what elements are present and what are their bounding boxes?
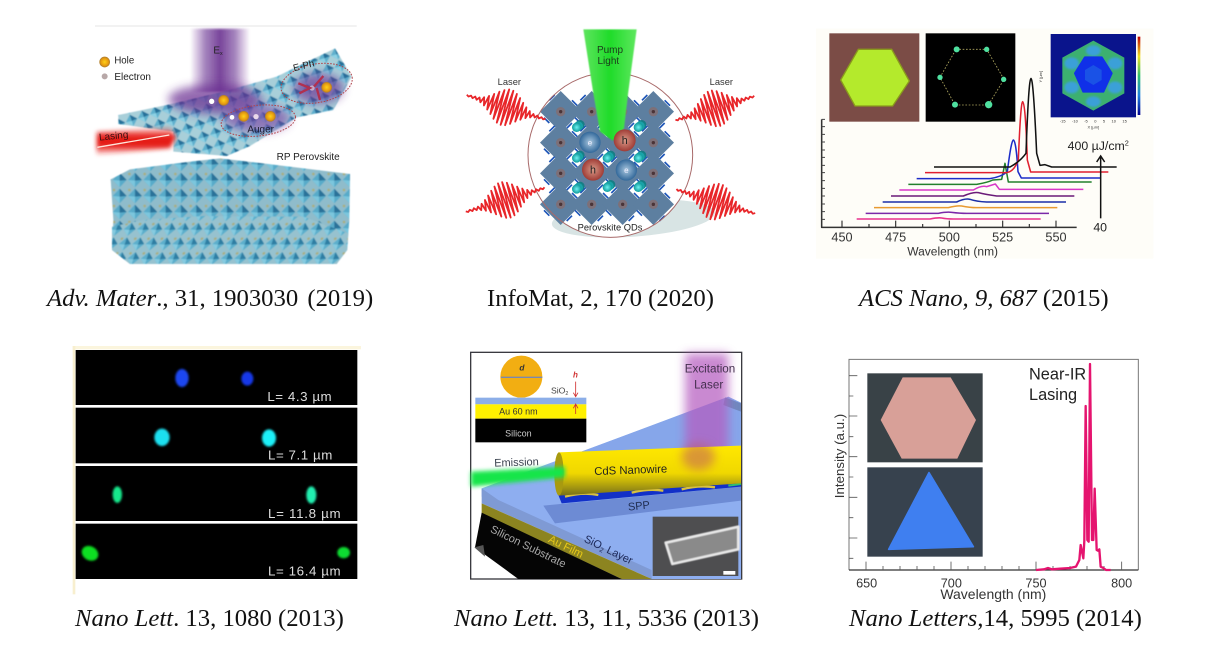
row: L = 11.8 um: L= 11.8 µm [268, 506, 341, 521]
x axis title: Wavelength (nm) [907, 244, 998, 258]
SPP field [558, 482, 741, 503]
photo: emission at hexagon corners [926, 33, 1015, 122]
panel: near-IR lasing spectrum [832, 359, 1138, 602]
x axis tick labels: 700 [941, 576, 962, 590]
laser labels: Laser [710, 77, 733, 87]
cross-section inset: 2 [565, 391, 568, 397]
excitation beam Ex: E [213, 45, 220, 56]
shadow ellipse [551, 194, 716, 242]
excitation beam Ex [168, 29, 343, 132]
x axis tick labels [856, 576, 1132, 590]
x axis tick labels: 450 [831, 230, 853, 244]
legend: hole and electron: Hole [114, 56, 134, 67]
caption: Nano Letters: Nano Letters,14, 5995 (2014) [848, 605, 1142, 632]
electrons and holes: h [590, 164, 596, 176]
CdS nanowire: CdS Nanowire [594, 463, 667, 478]
excitation laser: Laser [694, 378, 723, 391]
x axis tick labels: 650 [856, 576, 877, 590]
layer labels [488, 499, 651, 570]
legend: hole and electron [99, 56, 151, 83]
pump light beam [583, 29, 637, 141]
upper bent perovskite film [118, 48, 352, 156]
panel: nanowire emission length series [73, 346, 361, 594]
waterfall spectra chart [822, 78, 1117, 227]
electrons and holes [579, 129, 637, 181]
chart frame [849, 359, 1138, 570]
cross-section inset: d [519, 363, 525, 373]
label: Near-IR Lasing: Lasing [1029, 386, 1077, 404]
E-Ph region: E-Ph [292, 58, 316, 74]
laser labels [498, 77, 733, 87]
lasing beam [97, 127, 176, 155]
layer labels: Layer [602, 543, 635, 567]
row: L = 4.3 um: L= 4.3 µm [267, 389, 332, 404]
emission beam: Emission [494, 456, 539, 470]
cross-section inset: SiO [551, 385, 565, 395]
panel: perovskite QD pump light illustration [461, 29, 760, 242]
label: Perovskite QDs: Perovskite QDs [578, 222, 643, 232]
layer labels: SPP [627, 499, 651, 514]
x axis tick labels: 550 [1045, 230, 1067, 244]
excitation laser: Excitation [685, 363, 735, 376]
layer labels: SiO [582, 533, 604, 552]
Auger region [220, 102, 297, 140]
panel: CdS nanowire plasmon laser schematic [471, 352, 742, 579]
row: L = 16.4 um [76, 524, 357, 579]
photo: pink hexagon [867, 373, 983, 462]
photo: green hexagon [829, 33, 919, 122]
label: RP Perovskite: RP Perovskite [277, 152, 340, 163]
crystal lattice in circle [528, 73, 693, 237]
CdS nanowire [554, 443, 741, 496]
legend: hole and electron: Electron [114, 72, 151, 83]
layer labels: 2 [598, 547, 605, 555]
laser labels: Laser [498, 77, 521, 87]
fluence arrow: 40 [1093, 220, 1107, 234]
label: Near-IR Lasing [1029, 365, 1086, 404]
caption: ACS Nano: ACS Nano, 9, 687 (2015) [857, 285, 1109, 312]
cross-section inset: Silicon [505, 428, 532, 438]
electrons and holes: e [624, 166, 629, 175]
E-Ph region [278, 58, 355, 109]
pump light beam: Light [598, 56, 619, 67]
x axis tick labels: 525 [992, 230, 1013, 244]
layer labels: Au Film [546, 534, 585, 561]
x axis title: Wavelength (nm) [940, 586, 1046, 602]
electrons and holes: h [622, 135, 628, 147]
caption: Adv. Mater.: Adv. Mater., 31, 1903030 (2019) [45, 285, 373, 312]
caption: InfoMat: InfoMat, 2, 170 (2020) [487, 285, 714, 312]
layered substrate [474, 397, 741, 579]
row: L = 4.3 um [76, 350, 357, 405]
row: L = 7.1 um: L= 7.1 µm [268, 447, 332, 462]
layer labels: Silicon Substrate [488, 524, 568, 570]
caption: Nano Lett. 13, 1080: Nano Lett. 13, 1080 (2013) [74, 605, 344, 632]
caption: Nano Lett. 13, 11, 5336: Nano Lett. 13, 11, 5336 (2013) [453, 605, 759, 632]
excitation laser [685, 353, 735, 460]
cross-section inset: Au 60 nm [499, 406, 538, 416]
x axis tick labels: 750 [1025, 576, 1047, 590]
y axis title: Intensity (a.u.) [832, 414, 847, 498]
carriers [209, 82, 332, 122]
lasing beam: Lasing [98, 130, 129, 144]
pump light beam: Pump [597, 45, 623, 56]
Auger region: Auger [247, 125, 275, 136]
lasing spectrum line [1036, 364, 1111, 570]
fluence arrow: 400 µJ/cm [1068, 139, 1125, 153]
excitation beam Ex: x [220, 51, 223, 57]
x axis tick labels [831, 230, 1067, 244]
x axis tick labels: 475 [885, 230, 906, 244]
lower perovskite slab [111, 158, 350, 264]
row: L = 16.4 um: L= 16.4 µm [268, 563, 341, 578]
row: L = 11.8 um [76, 466, 357, 521]
panel: RP perovskite lasing illustration [95, 26, 357, 264]
panel: hexagon microcavity spectra [816, 29, 1153, 259]
electrons and holes: e [588, 138, 593, 147]
laser waves [461, 78, 760, 231]
x axis tick labels: 500 [939, 230, 960, 244]
field map heatmap: X [µm] [1088, 125, 1099, 130]
fluence arrow: 2 [1125, 139, 1129, 148]
SEM inset [653, 517, 738, 576]
row: L = 7.1 um [76, 408, 357, 463]
label: Near-IR Lasing: Near-IR [1029, 365, 1086, 383]
photo: blue triangle [867, 467, 983, 557]
cross-section inset [475, 356, 586, 442]
field map heatmap: Y [µm] [1038, 71, 1043, 82]
emission beam [471, 456, 565, 487]
fluence arrow [1068, 139, 1129, 234]
x axis tick labels: 800 [1111, 576, 1132, 590]
cross-section inset: h [573, 371, 578, 380]
field map heatmap [1038, 34, 1140, 130]
field map heatmap: -15 -10 -5 0 5 10 15 [1060, 119, 1128, 124]
